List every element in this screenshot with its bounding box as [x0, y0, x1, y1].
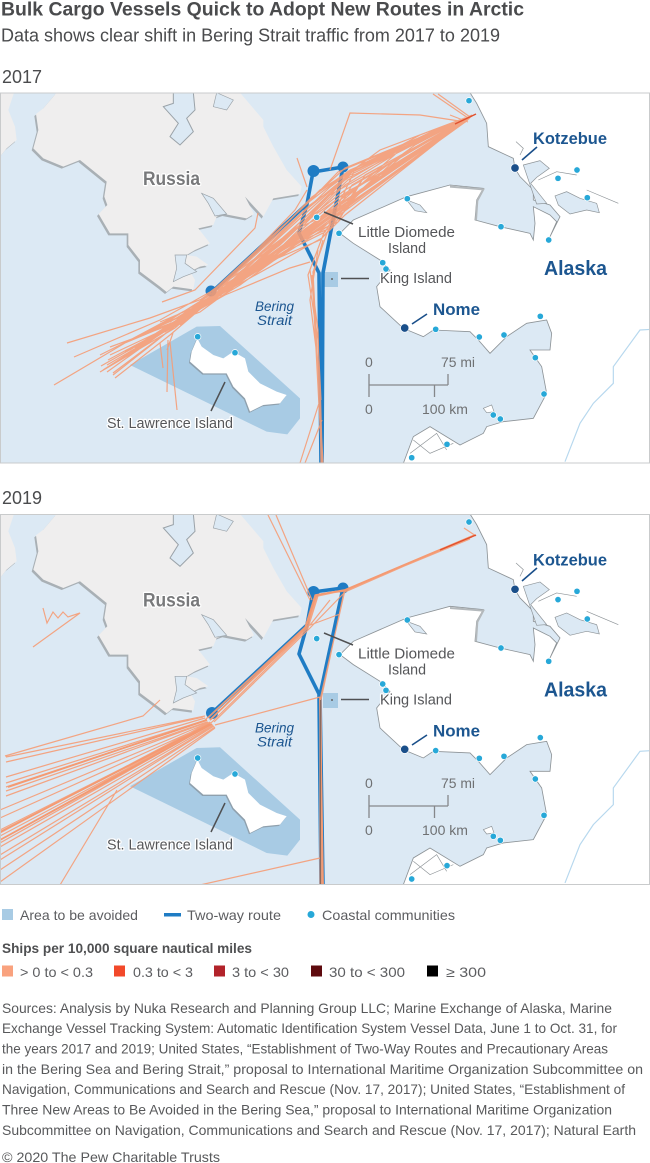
legend: ship density — [2, 964, 486, 980]
two-way routes — [206, 582, 348, 885]
legend: map symbols: Two-way route — [187, 907, 281, 923]
label: Little Diomede Island: Little Diomede — [358, 225, 455, 241]
ship track hotspot — [440, 535, 476, 550]
label: St. Lawrence Island: St. Lawrence Island — [107, 837, 233, 853]
legend: ship density: 0.3 to < 3 — [133, 964, 193, 980]
label: Nome: Nome — [433, 300, 480, 319]
label: King Island: King Island — [380, 271, 452, 287]
sources: Sources: Analysis by Nuka Research and Planning Group LLC; Marine Exchange of Alaska, Marine — [2, 1000, 612, 1016]
city leader lines — [412, 147, 537, 324]
ship track center line — [320, 700, 321, 884]
label: Russia: Russia — [143, 590, 200, 611]
label: Bering Strait: Strait — [257, 734, 293, 749]
ship tracks 2017 — [54, 94, 472, 463]
subtitle: Data shows clear shift in Bering Strait traffic from 2017 to 2019 — [1, 26, 500, 46]
legend: ship density: 3 to < 30 — [232, 964, 289, 980]
sources: the years 2017 and 2019; United States, “Establishment of Two-Way Routes and Precautionary Areas — [2, 1040, 608, 1056]
label: Little Diomede Island: Little Diomede — [358, 646, 455, 662]
label: Kotzebue: Kotzebue — [533, 129, 607, 148]
scale bar — [366, 357, 474, 414]
two-way routes — [206, 162, 348, 463]
label: Bering Strait: Bering — [255, 299, 294, 314]
scale bar — [366, 778, 474, 835]
scale bar: 0 — [365, 822, 373, 838]
heading: 2019: 2019 — [2, 488, 42, 508]
sources: Navigation, Communications and Search and Rescue (Nov. 17, 2017); United States, “Establishment of — [2, 1081, 625, 1097]
community dots — [194, 98, 590, 461]
scale bar: 100 km — [422, 401, 468, 417]
king island area to be avoided — [323, 693, 338, 708]
leader lines — [211, 212, 369, 411]
scale bar: 75 mi — [441, 354, 475, 370]
legend: ship density: 30 to < 300 — [329, 964, 405, 980]
label: Bering Strait — [255, 301, 294, 325]
label: Little Diomede Island — [359, 226, 454, 253]
scale bar: 75 mi — [441, 775, 475, 791]
label: Little Diomede Island — [359, 648, 454, 674]
label: Bering Strait: Strait — [257, 313, 293, 328]
label: St. Lawrence Island: St. Lawrence Island — [107, 416, 233, 432]
map frame 2017 — [0, 93, 650, 463]
leader lines — [211, 633, 369, 832]
legend: map symbols — [2, 907, 455, 923]
community dots — [194, 519, 590, 882]
map frame 2019 — [0, 514, 650, 884]
sources: Subcommittee on Navigation, Communications and Search and Rescue (Nov. 17, 2017); Natural Earth — [2, 1122, 636, 1138]
legend: map symbols: Coastal communities — [322, 907, 455, 923]
label: Bering Strait — [255, 722, 294, 746]
ship track hotspot — [455, 114, 476, 124]
heading: 2017: 2017 — [2, 67, 42, 87]
legend heading: Ships per 10,000 square nautical miles — [2, 940, 252, 956]
ship tracks 2019 — [0, 515, 476, 885]
sources: Three New Areas to Be Avoided in the Bering Sea,” proposal to International Maritime Organization — [2, 1102, 612, 1118]
label: Kotzebue: Kotzebue — [533, 550, 607, 569]
base map: land, sea, avoided area — [0, 93, 650, 463]
label: Russia: Russia — [143, 169, 200, 190]
label: King Island: King Island — [380, 692, 452, 708]
king island area to be avoided — [323, 272, 338, 287]
scale bar: 0 — [365, 775, 373, 791]
sources — [2, 1000, 643, 1138]
sources: Exchange Vessel Tracking System: Automatic Identification System Vessel Data, June 1 to Oct. 31, for — [2, 1020, 617, 1036]
label: Bering Strait: Bering — [255, 720, 294, 735]
scale bar: 0 — [365, 354, 373, 370]
scale bar: 100 km — [422, 822, 468, 838]
panel: 2019 map — [0, 514, 650, 885]
legend: ship density: > 0 to < 0.3 — [20, 964, 93, 980]
city leader lines — [412, 568, 537, 745]
label: Alaska: Alaska — [544, 258, 608, 280]
label: Alaska: Alaska — [544, 679, 608, 701]
label: Little Diomede Island: Island — [388, 241, 426, 257]
legend: map symbols: Area to be avoided — [20, 907, 138, 923]
base map: land, sea, avoided area — [0, 514, 650, 885]
panel: 2017 map — [0, 93, 650, 463]
legend: ship density: ≥ 300 — [446, 964, 486, 980]
label: Little Diomede Island: Island — [388, 662, 426, 678]
scale bar: 0 — [365, 401, 373, 417]
label: Nome: Nome — [433, 721, 480, 740]
sources: in the Bering Sea and Bering Strait,” proposal to International Maritime Organization Subcommittee on — [2, 1061, 643, 1077]
